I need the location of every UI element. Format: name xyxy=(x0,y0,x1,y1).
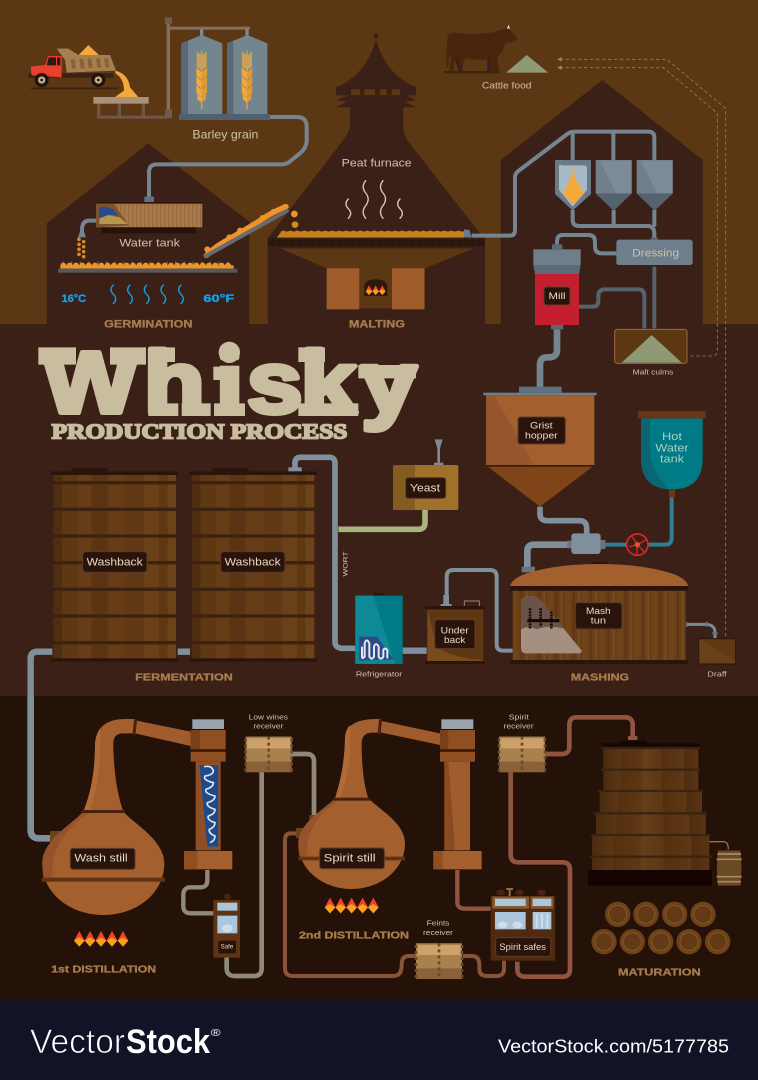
title: Whisky: Whisky xyxy=(43,333,417,431)
subtitle: Production Process: PRODUCTION PROCESS xyxy=(52,422,347,444)
label: Barley grain: Barley grain xyxy=(192,127,258,141)
under back: Under xyxy=(441,625,469,635)
safe box: Safe xyxy=(221,945,234,951)
loading platform and hoist xyxy=(93,17,250,119)
kiln floor grating xyxy=(268,239,485,247)
delivery truck unloading grain xyxy=(28,45,138,97)
footer: VectorStock logo: ® xyxy=(211,1028,222,1039)
dashed return lines to cattle food xyxy=(560,59,726,637)
pipe network: hoppers to dressing xyxy=(573,210,654,240)
red hand valve xyxy=(627,534,648,555)
building: milling house xyxy=(501,80,703,325)
peat smoke xyxy=(346,181,402,218)
mash tun: tun xyxy=(591,616,606,626)
pipe: spirit still return xyxy=(285,833,416,976)
conveyor with grain xyxy=(204,207,298,257)
mill xyxy=(533,244,581,329)
heading: GERMINATION: GERMINATION xyxy=(104,319,192,331)
temperature 16°C: 16°C xyxy=(62,293,86,305)
heading: 2nd DISTILLATION: 2nd DISTILLATION xyxy=(299,930,409,941)
washback tank 1: Washback xyxy=(87,557,143,569)
water tank xyxy=(78,197,203,237)
temperature 60°F: 60°F xyxy=(203,293,235,305)
heading: MATURATION: MATURATION xyxy=(618,968,701,979)
pipe: mash tun to draff xyxy=(687,622,718,639)
label: Cattle food: Cattle food xyxy=(482,81,532,91)
hot water tank: Hot xyxy=(662,431,682,443)
background: middle band xyxy=(0,324,758,696)
grist hopper: Grist xyxy=(530,421,553,431)
wash still: Wash still xyxy=(74,853,128,865)
label: WORT: WORT xyxy=(342,552,349,576)
pipe: wort line xyxy=(295,457,356,648)
draff container xyxy=(699,639,736,664)
wash still xyxy=(42,719,191,915)
background: upper outdoor band xyxy=(0,0,758,325)
pipe: hopper to valve xyxy=(540,507,587,534)
footer band xyxy=(0,999,758,1080)
footer: VectorStock logo: Vector xyxy=(30,1023,125,1061)
fire under spirit still xyxy=(325,898,379,913)
pipe: column to spirit safes xyxy=(457,870,491,909)
grist hopper xyxy=(483,387,597,507)
pipe: silo to water tank xyxy=(149,117,307,200)
grist hopper: hopper xyxy=(525,430,558,440)
hot water tank: tank xyxy=(660,454,685,466)
pipes: washbacks links xyxy=(31,652,190,697)
condenser column 1 xyxy=(184,719,232,869)
condenser column 2 xyxy=(433,719,482,869)
barley silos xyxy=(179,29,270,120)
malt culms box xyxy=(615,329,687,363)
building: peat furnace kiln xyxy=(268,33,485,325)
falling water and grain drops xyxy=(79,239,84,259)
mash tun xyxy=(510,562,688,664)
pipe: mill to grist hopper xyxy=(540,329,557,388)
pipe: spirit safes to receiver loop xyxy=(511,772,570,977)
pipe: column to safe xyxy=(183,870,213,913)
footer: image URL: VectorStock.com/5177785 xyxy=(498,1036,729,1057)
dressing machine: Dressing xyxy=(632,248,679,260)
germinating barley bed xyxy=(58,264,237,273)
refrigerator xyxy=(355,593,403,664)
spirit safes xyxy=(491,888,555,961)
dressing machine xyxy=(616,238,693,265)
footer: VectorStock logo: Stock xyxy=(126,1023,211,1061)
pipe: safe to low wines receiver xyxy=(227,772,262,976)
label: Low wines receiver: Low wines xyxy=(249,713,288,722)
valve junction xyxy=(567,533,605,554)
under back xyxy=(425,595,484,664)
spirit safes: Spirit safes xyxy=(499,942,546,952)
cattle food pile xyxy=(506,55,548,73)
spirit receiver xyxy=(499,737,545,772)
hot water tank: Water xyxy=(655,442,689,454)
pipe flange xyxy=(288,467,302,471)
pipe: spirit receiver to maturation xyxy=(545,717,633,754)
spirit still xyxy=(296,718,440,889)
mill: Mill xyxy=(548,291,566,301)
label: Spirit receiver: Spirit xyxy=(509,713,529,722)
heading: 1st DISTILLATION: 1st DISTILLATION xyxy=(51,965,156,976)
label: Draff: Draff xyxy=(707,670,728,679)
label: Water tank: Water tank xyxy=(119,238,181,250)
hot water tank xyxy=(638,411,706,497)
pipe: under back to mash tun xyxy=(447,570,513,651)
pipe: dressing to mill xyxy=(557,235,616,253)
yeast tank: Yeast xyxy=(410,483,440,495)
under back: back xyxy=(444,635,466,645)
label: Spirit receiver: receiver xyxy=(504,722,534,731)
arrowheads xyxy=(557,57,562,70)
label: Low wines receiver xyxy=(249,713,288,731)
stacked barrels xyxy=(591,902,730,954)
washback tank 2 xyxy=(189,468,317,662)
label: Spirit receiver xyxy=(504,713,534,731)
pipe: refrigerator to under back xyxy=(403,641,427,660)
hot water pipe xyxy=(603,497,672,545)
label: Refrigerator: Refrigerator xyxy=(356,670,403,679)
maturation vat xyxy=(588,736,712,886)
yeast tank xyxy=(393,439,458,510)
footer: VectorStock logo xyxy=(30,1023,222,1061)
pipe: yeast line xyxy=(338,508,425,529)
label: Low wines receiver: receiver xyxy=(253,722,284,731)
pipe: valve to mash tun xyxy=(527,545,568,568)
kiln doors and fire xyxy=(327,268,424,309)
washback tank 1 xyxy=(51,468,179,662)
pipe: feints receiver to safes xyxy=(463,956,504,976)
label: Feints receiver: Feints xyxy=(427,919,450,928)
safe box xyxy=(213,893,240,958)
pipe: low wines receiver to spirit still xyxy=(292,754,314,815)
fire under wash still xyxy=(74,931,128,947)
background: lower band xyxy=(0,696,758,1000)
pipe network: kiln to hoppers xyxy=(472,132,654,236)
mash tun: Mash xyxy=(586,606,611,616)
label: Feints receiver: receiver xyxy=(423,928,454,937)
label: Malt culms: Malt culms xyxy=(633,368,674,377)
dressing hoppers xyxy=(555,160,673,211)
label: Feints receiver xyxy=(423,919,454,937)
building: germination house xyxy=(47,143,249,325)
spirit still: Spirit still xyxy=(324,853,376,865)
pipe: dressing and mill to malt culms xyxy=(579,267,654,328)
small cask xyxy=(709,842,742,886)
low wines receiver xyxy=(246,737,292,772)
water vapour waves xyxy=(111,285,183,304)
label: Peat furnace: Peat furnace xyxy=(342,158,412,170)
malting grain floor xyxy=(277,229,472,238)
feints receiver xyxy=(416,943,462,979)
cow xyxy=(444,25,518,73)
heading: MASHING: MASHING xyxy=(571,673,629,684)
washback tank 2: Washback xyxy=(225,557,281,569)
heading: MALTING: MALTING xyxy=(349,319,405,331)
pipe: washback to wash still xyxy=(31,695,51,838)
heading: FERMENTATION: FERMENTATION xyxy=(135,673,233,684)
